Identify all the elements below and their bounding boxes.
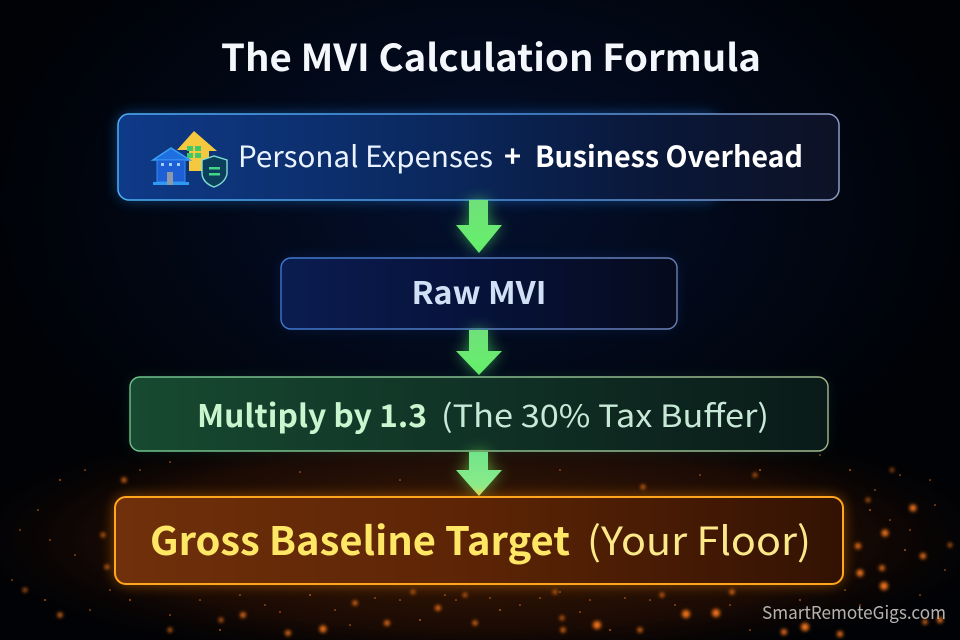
label: raw MVI: Raw MVI <box>412 268 546 313</box>
box 4: gross baseline target <box>115 497 843 584</box>
box 2: raw MVI <box>281 258 677 329</box>
title: The MVI Calculation Formula <box>221 28 761 82</box>
box 1: personal expenses plus business overhead <box>118 114 839 200</box>
label: gross baseline target, your floor: (Your Floor) <box>587 511 811 567</box>
watermark: SmartRemoteGigs.com <box>762 599 946 625</box>
box 3: multiply by 1.3 <box>130 377 828 451</box>
orange particles <box>11 454 952 637</box>
label: personal expenses plus business overhead: Business Overhead <box>535 134 803 176</box>
label: personal expenses plus business overhead: Personal Expenses <box>238 134 493 176</box>
arrow 2 <box>456 330 502 375</box>
arrow 3 <box>456 452 502 496</box>
icon: house, bank and shield <box>153 131 227 187</box>
label: personal expenses plus business overhead: + <box>504 134 521 176</box>
label: multiply by 1.3, the 30% tax buffer: (The 30% Tax Buffer) <box>441 391 769 436</box>
arrow 1 <box>456 200 502 253</box>
label: multiply by 1.3, the 30% tax buffer: Multiply by 1.3 <box>197 391 427 436</box>
label: gross baseline target, your floor: Gross Baseline Target <box>150 511 570 567</box>
